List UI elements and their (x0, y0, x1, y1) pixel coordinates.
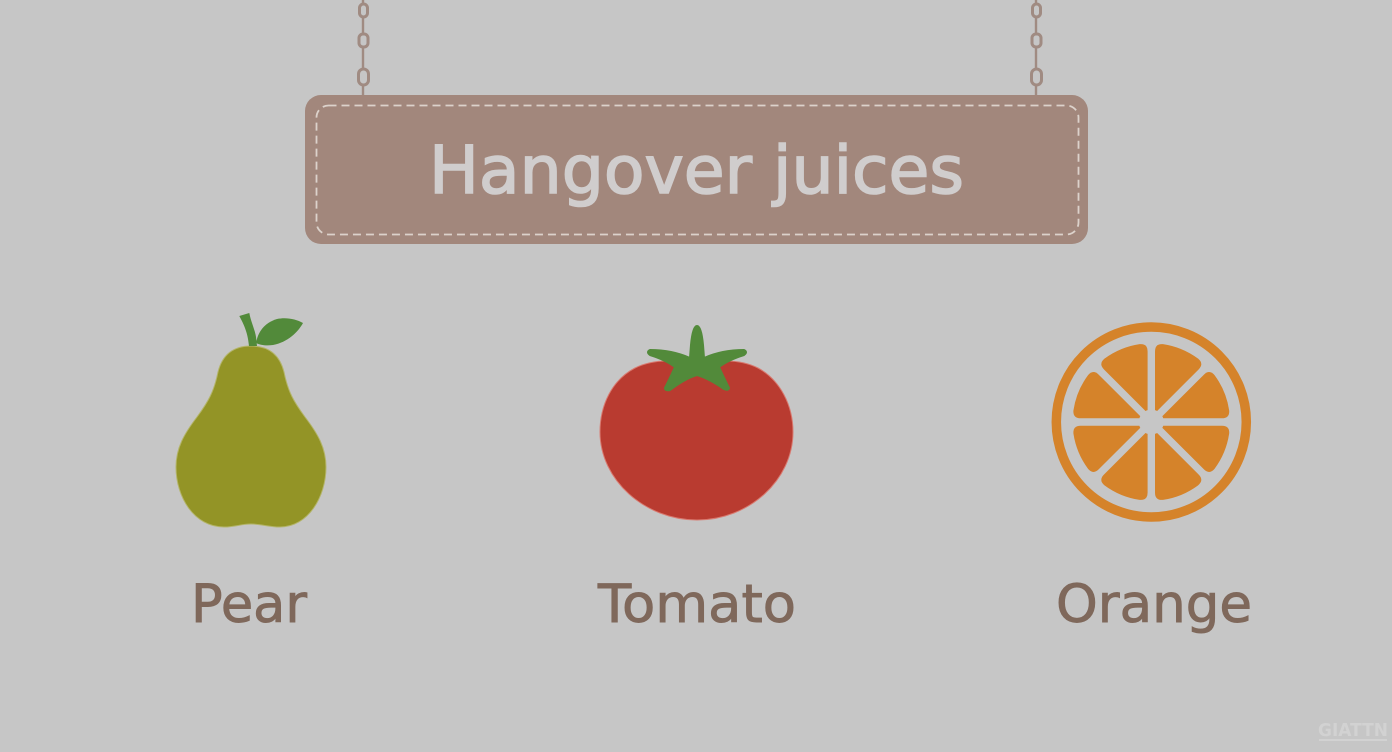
icon: orange slice (1056, 327, 1246, 517)
icon: right hanging chain (1032, 0, 1042, 95)
icon: tomato (600, 326, 793, 520)
panel: hanging title sign (305, 95, 1088, 244)
watermark: GIATTN (1318, 720, 1388, 741)
title: Hangover juices (429, 132, 964, 209)
icon: left hanging chain (358, 0, 368, 95)
label: Tomato: Tomato (597, 574, 796, 635)
icon: pear (176, 313, 326, 527)
label: Orange: Orange (1056, 574, 1252, 635)
label: Pear: Pear (191, 574, 307, 635)
